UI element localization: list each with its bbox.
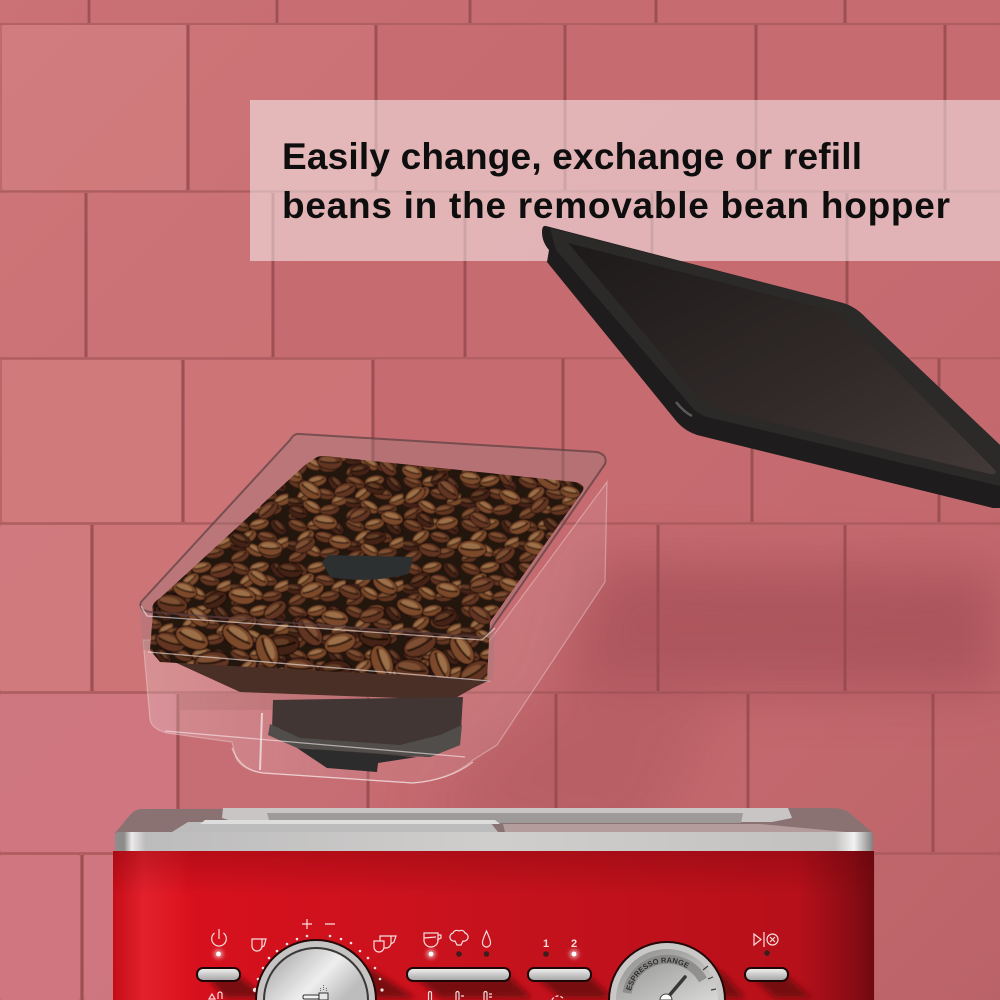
lid corner highlight	[676, 402, 692, 416]
icon: temperature bars	[428, 992, 492, 1000]
icon: single cup	[252, 939, 266, 951]
lower hopper glass	[143, 482, 607, 783]
gauge label: ESPRESSO RANGE	[626, 958, 690, 990]
soft shadow on wall	[420, 560, 1000, 850]
knob on hopper floor	[322, 555, 412, 580]
espresso range gauge	[608, 941, 726, 1000]
gauge scale band	[627, 959, 703, 993]
translucent caption banner	[250, 100, 1000, 261]
outlet collar	[272, 697, 463, 757]
outlet spout	[297, 748, 417, 772]
shot numbers	[543, 938, 577, 950]
outlet ring	[268, 724, 462, 757]
transparent bean hopper	[140, 434, 607, 783]
panel icons	[209, 919, 778, 1000]
left selector dial	[255, 939, 377, 1000]
start stop button	[745, 968, 788, 981]
portafilter symbol	[303, 985, 328, 1000]
icon: auto clean	[552, 996, 564, 1000]
machine top surface	[115, 808, 873, 833]
lid recessed panel	[568, 243, 996, 474]
status LEDs	[214, 950, 770, 958]
beans	[140, 450, 590, 689]
shot numbers: 2	[571, 938, 577, 950]
button shadows	[207, 955, 812, 998]
drink select button	[407, 968, 510, 981]
upper tray glass	[140, 434, 606, 680]
grinder outlet	[170, 660, 490, 772]
shot select button	[528, 968, 591, 981]
red body	[113, 851, 874, 1000]
outlet cone	[170, 660, 490, 700]
espresso machine	[113, 768, 874, 1000]
icon: power	[212, 929, 226, 946]
caption text: Easily change, exchange or refill	[282, 136, 862, 177]
hopper rim	[140, 434, 606, 637]
shot numbers: 1	[543, 938, 549, 950]
icon: water drop	[482, 931, 491, 947]
lid top rim	[550, 228, 1000, 486]
icon: start and cancel	[754, 932, 764, 947]
hopper front edges	[141, 606, 495, 783]
caption text: beans in the removable bean hopper	[282, 185, 950, 226]
gauge ticks	[703, 966, 716, 990]
icon: grounds	[209, 992, 222, 999]
gauge needle	[668, 977, 685, 997]
icon: strength plus and minus	[302, 919, 335, 929]
power button	[197, 968, 240, 981]
lid outer shell	[542, 226, 1000, 508]
glass highlight	[260, 713, 262, 770]
dial tick dots	[253, 935, 384, 992]
caption text	[282, 136, 950, 226]
icon: steam cloud	[450, 930, 468, 945]
icon: double cups	[374, 936, 396, 952]
icon: coffee cup	[424, 933, 441, 947]
bean hopper lid	[542, 226, 1000, 508]
chrome band	[115, 832, 873, 852]
